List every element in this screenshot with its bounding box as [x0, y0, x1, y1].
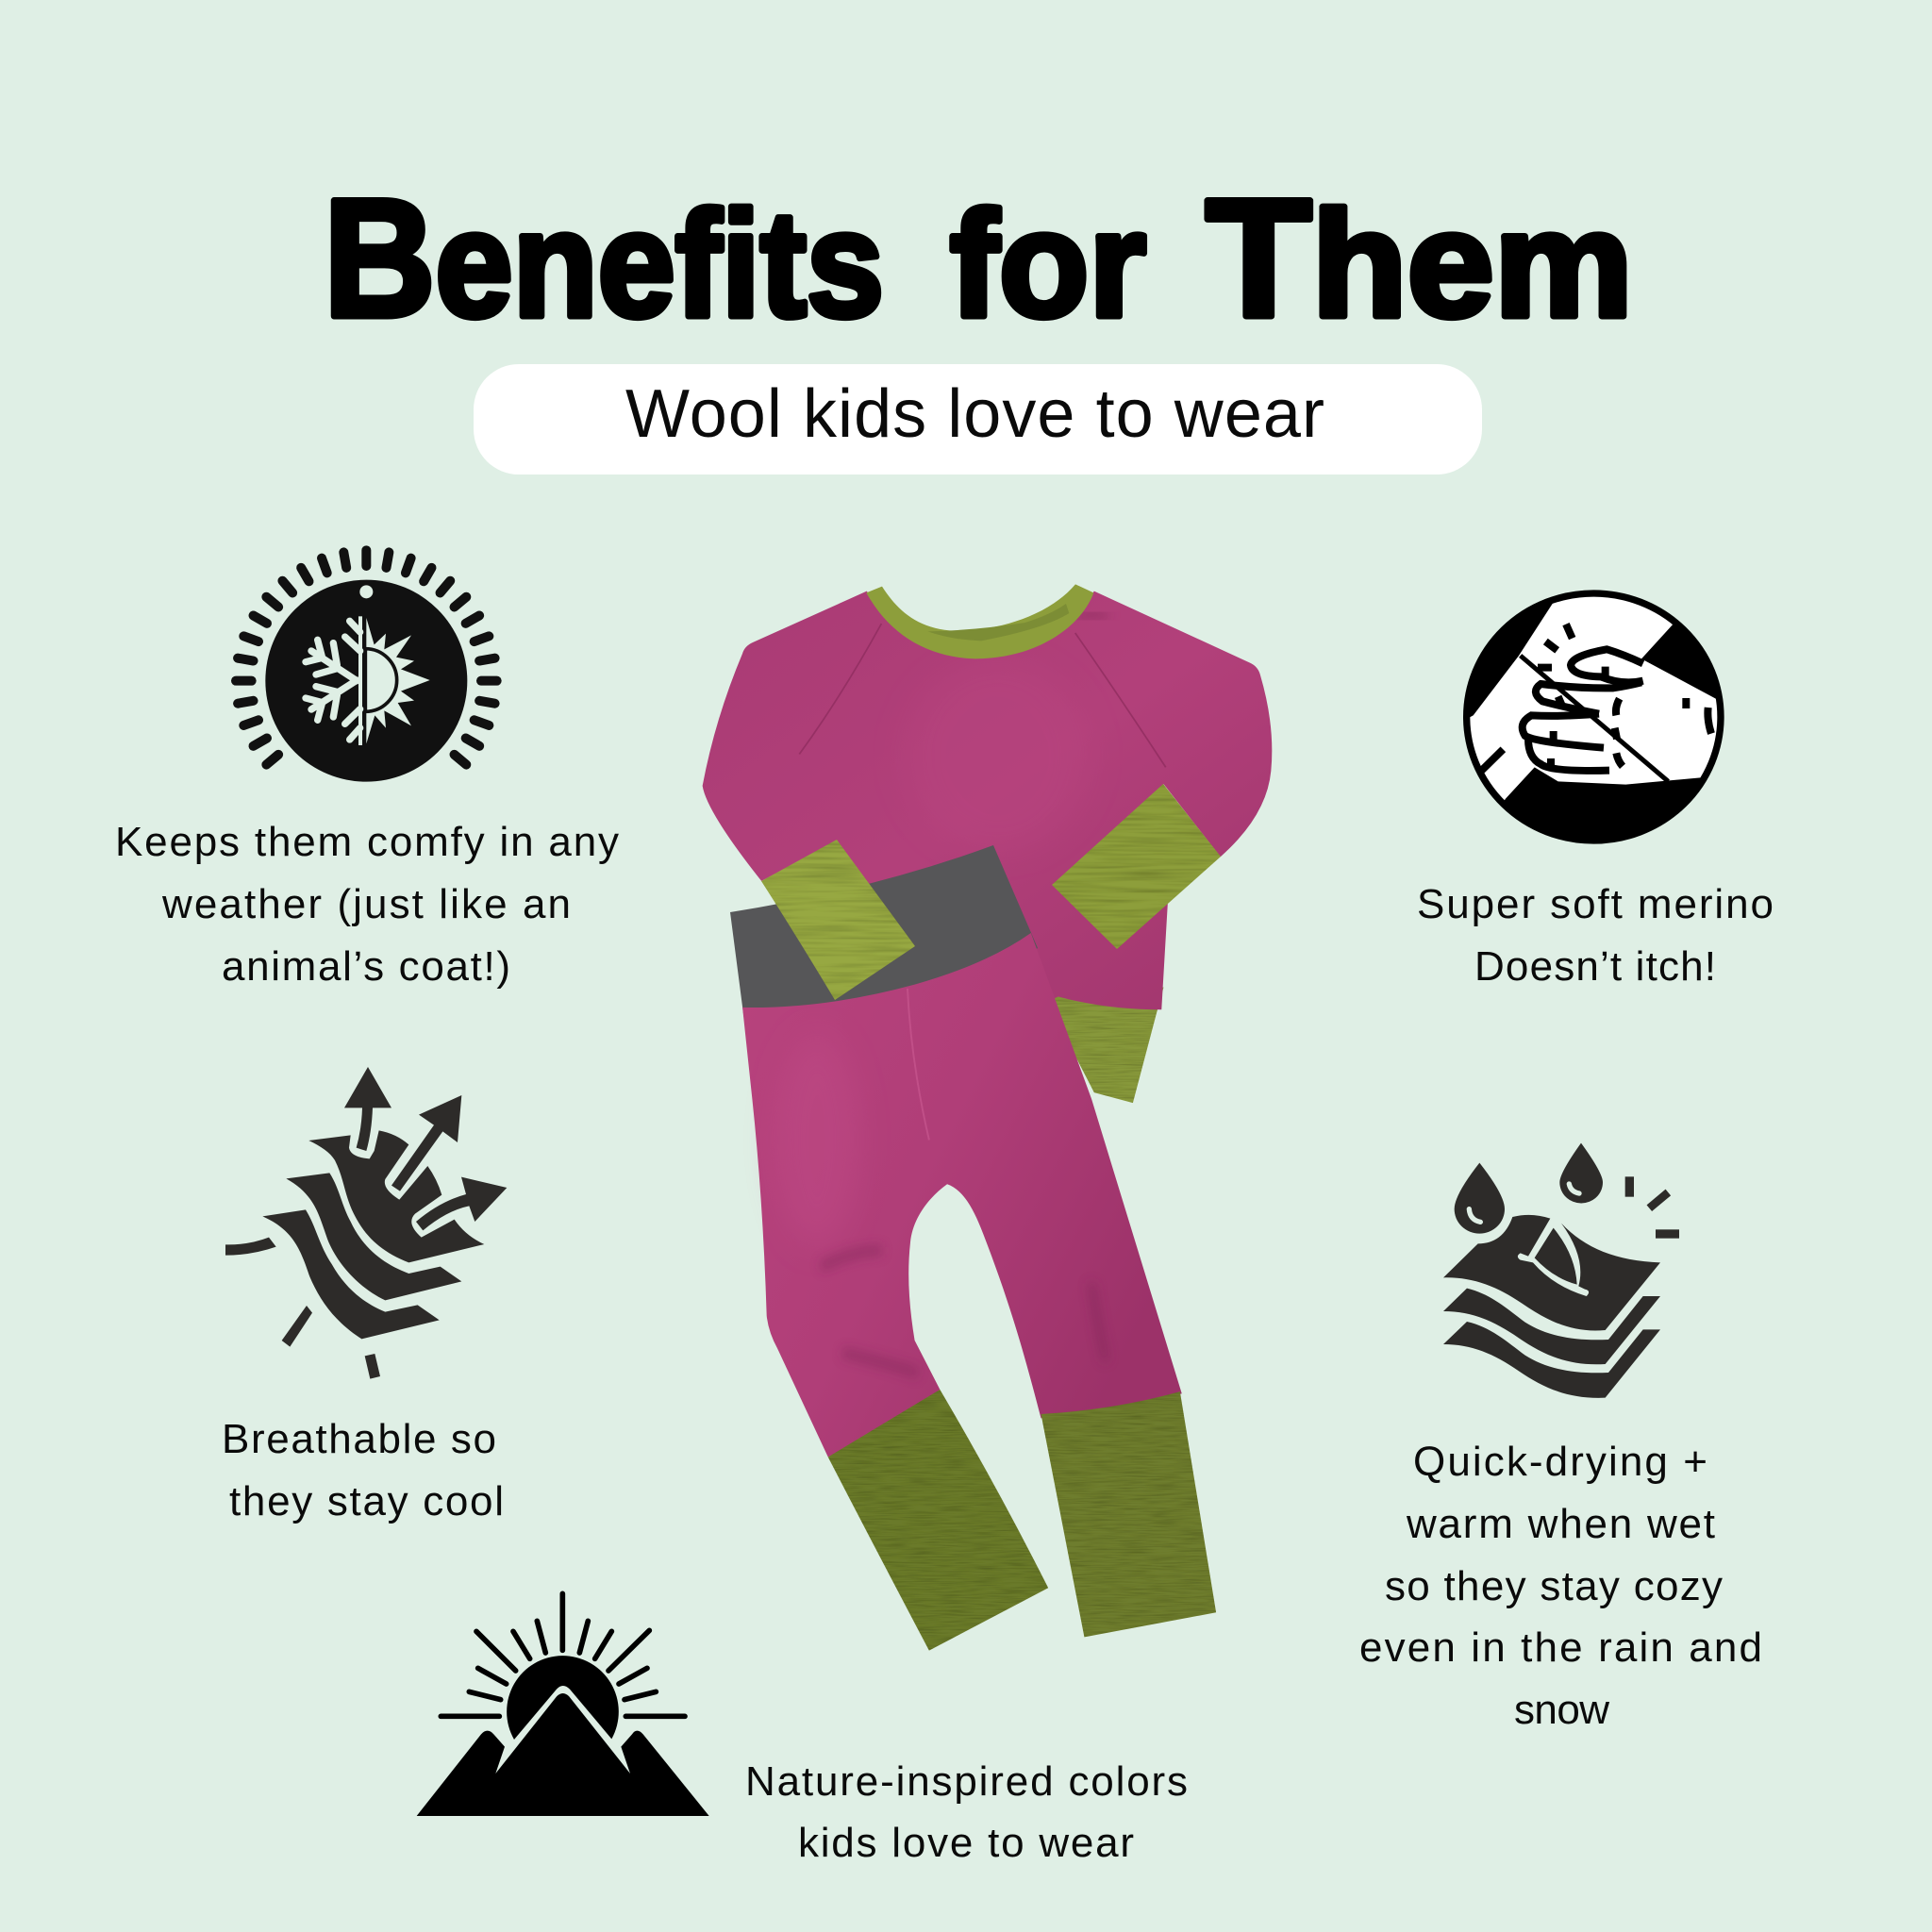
text: quick drying: Quick-drying +: [1413, 1439, 1707, 1485]
icon: sun rising over mountains: [417, 1593, 709, 1816]
text: quick drying: even in the rain and: [1359, 1624, 1762, 1671]
icon: snowflake and sun thermometer dial: [236, 550, 497, 782]
text: comfy in any weather: [115, 819, 619, 990]
title: for: [950, 179, 1146, 348]
text: quick drying: so they stay cozy: [1385, 1563, 1723, 1609]
text: nature-inspired colors: [745, 1758, 1188, 1866]
shirt left cuff: [761, 840, 915, 1000]
text: nature-inspired colors: kids love to wear: [798, 1820, 1134, 1866]
shirt: [703, 591, 1272, 1103]
text: comfy in any weather: weather (just like an: [161, 881, 571, 927]
collar: [866, 584, 1093, 658]
text: breathable: Breathable so: [222, 1416, 496, 1462]
subtitle pill: Wool kids love to wear: [625, 376, 1324, 452]
text: breathable: they stay cool: [229, 1478, 504, 1524]
text: breathable: [222, 1416, 504, 1524]
product photo: wool shirt and pants: [703, 584, 1272, 1651]
text: quick drying: warm when wet: [1406, 1501, 1715, 1547]
icon: breathable fabric layers with arrows: [225, 1067, 507, 1379]
title: [324, 164, 1633, 352]
text: quick drying: snow: [1514, 1687, 1609, 1733]
text: comfy in any weather: Keeps them comfy in any: [115, 819, 619, 865]
text: super soft merino: Doesn’t itch!: [1474, 943, 1716, 990]
text: comfy in any weather: animal’s coat!): [222, 943, 510, 990]
text: super soft merino: Super soft merino: [1417, 881, 1774, 927]
title: Benefits: [324, 164, 884, 352]
text: nature-inspired colors: Nature-inspired colors: [745, 1758, 1188, 1805]
pants: [742, 933, 1216, 1651]
shirt right cuff: [1052, 784, 1221, 949]
subtitle pill: [474, 364, 1482, 475]
text: quick drying: [1359, 1439, 1762, 1733]
title: Them: [1206, 164, 1633, 352]
gray waistband: [730, 845, 1038, 1028]
text: super soft merino: [1417, 881, 1774, 990]
icon: water drops on fabric layers: [1443, 1143, 1679, 1398]
icon: hand feeling soft fabric: [1463, 590, 1724, 844]
